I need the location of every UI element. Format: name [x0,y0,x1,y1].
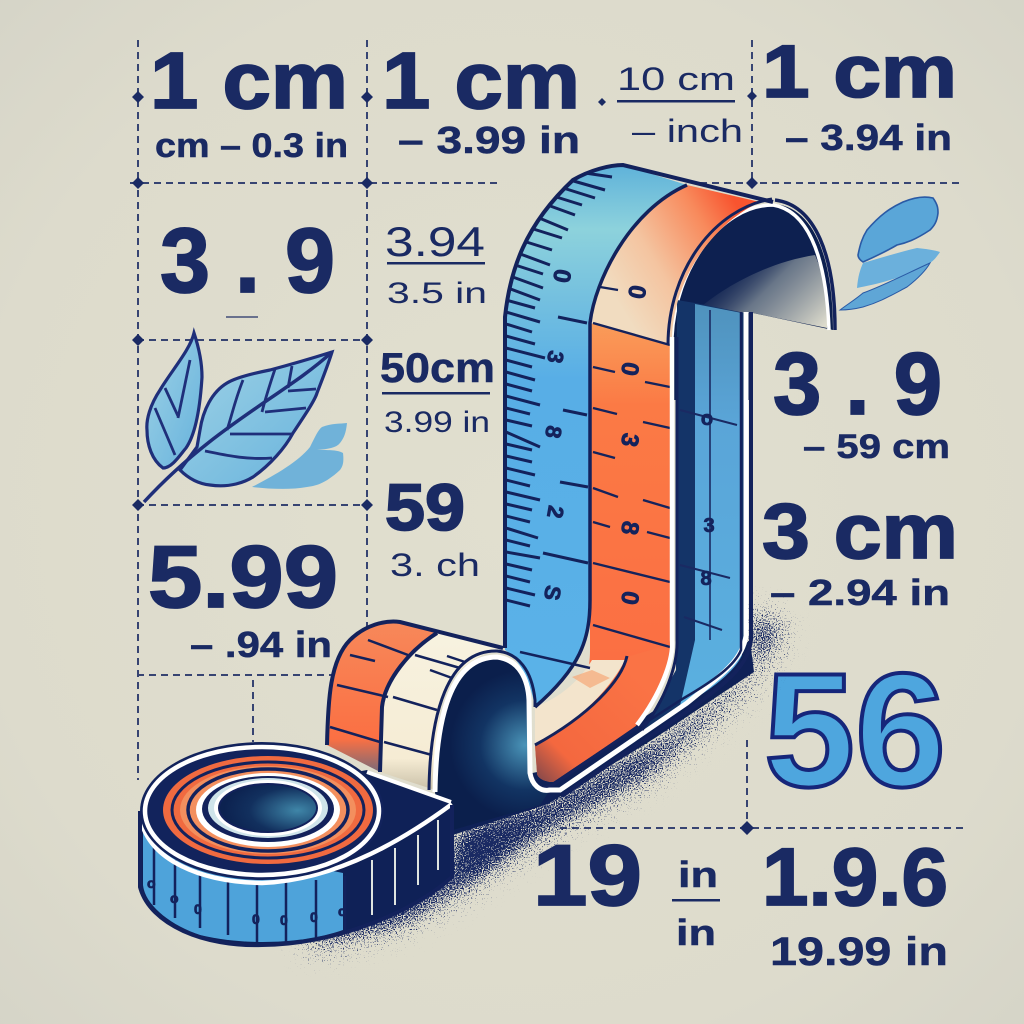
cell: in over in: in [678,854,718,895]
tape back panel blue [528,300,751,796]
cell: in over in [672,854,720,953]
icon: leaves left [144,333,347,502]
big blue number: 56 [764,640,946,821]
cell: 3.94 fraction: 3.94 [385,218,485,265]
cell: 1 cm top left [150,36,348,165]
inner edge of the orange band [637,337,672,725]
cell: 10 cm fraction [617,61,743,149]
tape orange band: 0 [615,589,644,607]
tape measure case [140,742,452,945]
infographic canvas [130,40,963,974]
tape blue band [505,165,773,707]
tape back panel blue: 8 [700,568,712,590]
cell: 50 cm fraction: 50cm [380,344,495,391]
cell: 1.9.6: 19.99 in [770,930,948,974]
tape orange band [535,185,772,790]
cell: 19: 19 [533,828,642,924]
cell: 1 cm second: 1 cm [382,36,580,125]
tape measure case: 0 [194,901,202,917]
cell: 5.99: – .94 in [190,624,332,665]
dashed layout grid [130,40,965,828]
tape measure case: o [170,890,179,906]
cell: 50 cm fraction [380,344,495,439]
navy under-shadow of tape [450,640,754,835]
tape blue band: 8 [540,424,567,440]
cell: 59 [385,470,480,583]
cell: 50 cm fraction: 3.99 in [384,406,490,439]
tape orange band: 8 [615,519,644,537]
tape orange band: 0 [622,283,651,301]
cell: 5.99 [148,527,338,665]
tape blue band: 0 [547,267,576,285]
cell: 1 cm third: – 3.94 in [785,117,952,158]
tape orange band: 0 [615,360,644,378]
cell: 1.9.6 [762,832,948,974]
cell: 1 cm second: – 3.99 in [398,120,580,162]
stippled ground shadow [300,610,785,948]
tape measure case: c [338,903,346,919]
cell: 3.94 fraction: 3.5 in [387,277,487,310]
ruler ticks [506,173,612,642]
tape measure case: 0 [280,912,288,928]
tape measure case: 0 [310,909,318,925]
cell: 3.9 left: 3 . 9 [160,210,335,312]
tape orange band: 3 [615,431,644,449]
cell: 3.9 right: – 59 cm [803,428,950,466]
grid markers [132,91,758,835]
cell: 59: 3. ch [390,547,480,583]
cell: 10 cm fraction: – inch [632,113,743,149]
tape measure case: o [147,875,156,891]
cell: 1 cm top left: cm – 0.3 in [155,127,348,165]
cell: 10 cm fraction: 10 cm [617,61,735,97]
cell: 1 cm top left: 1 cm [150,36,348,125]
tape measure case: 0 [252,911,260,927]
cell: 3 cm: – 2.94 in [770,572,950,613]
cell: 3.9 right: 3 . 9 [773,334,942,433]
tape back panel blue: o [701,408,713,430]
tape back panel blue: 3 [703,515,715,537]
cell: 1.9.6: 1.9.6 [762,832,948,923]
cell: 1 cm third [762,30,957,158]
small tape roll [327,622,550,830]
cell: 3.94 fraction [385,218,487,310]
cell: 1 cm second [382,36,580,162]
cell: 59: 59 [385,470,465,544]
cell: 3 cm [762,487,958,613]
tape blue band: 3 [542,349,569,365]
icon: leaves right [840,197,940,310]
tape interior arch [672,200,835,400]
tape blue band: S [539,584,566,602]
cell: in over in: in [676,912,716,953]
cell: 1 cm third: 1 cm [762,30,957,113]
tape blue band: 2 [542,504,569,520]
cell: 3 cm: 3 cm [762,487,958,575]
cell: 5.99: 5.99 [148,527,338,626]
